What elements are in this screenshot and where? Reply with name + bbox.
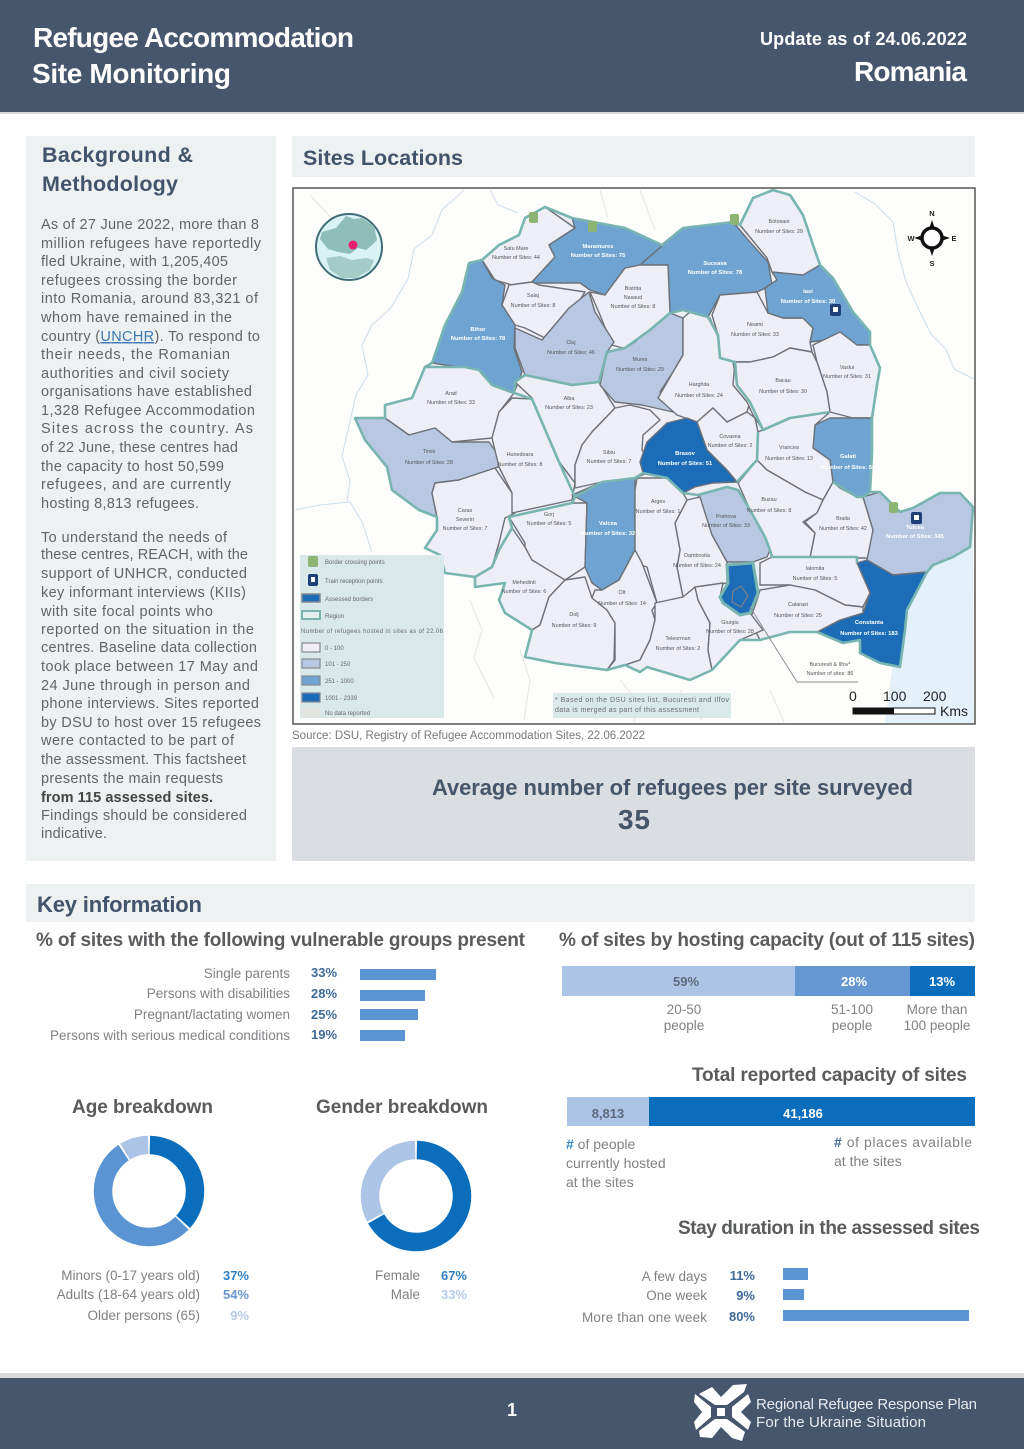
chart: gender breakdown: Male — [391, 1287, 420, 1302]
panel: background and methodology — [26, 136, 276, 861]
paragraph: context: authorities and civil society — [41, 366, 230, 382]
section heading: key information — [26, 884, 975, 922]
legend: No data reported — [325, 711, 370, 717]
chart: stay duration: 9% — [736, 1288, 755, 1303]
county labels: Number of Sites: 7 — [443, 526, 487, 532]
county labels: Number of Sites: 32 — [581, 531, 635, 537]
chart: stay duration: Stay duration in the assessed sites — [678, 1218, 980, 1239]
paragraph: methodology: To understand the needs of — [41, 530, 228, 546]
chart: gender breakdown: 33% — [441, 1287, 467, 1302]
county labels: Teleorman — [665, 636, 691, 642]
chart: stay duration: One week — [646, 1288, 707, 1303]
county labels: Botosani — [769, 219, 789, 225]
county labels: Suceava — [703, 261, 727, 267]
county labels: Number of Sites: 44 — [492, 255, 540, 261]
county labels: Prahova — [716, 514, 736, 520]
county labels: Number of Sites: 2 — [708, 443, 752, 449]
county labels: Number of Sites: 8 — [747, 508, 791, 514]
county labels: Number of Sites: 24 — [673, 563, 721, 569]
legend: Region — [325, 614, 344, 620]
callout: average number of refugees — [292, 747, 975, 861]
update date and country: Romania — [854, 56, 967, 87]
county labels: Bistrita — [625, 286, 641, 292]
chart: gender breakdown: Female — [375, 1268, 420, 1283]
chart: total reported capacity: currently hosted — [566, 1155, 666, 1171]
logo text — [756, 1396, 977, 1431]
county labels: Satu Mare — [504, 246, 528, 252]
chart: total reported capacity: Total reported capacity of sites — [692, 1065, 967, 1086]
chart: vulnerable groups: 33% — [311, 965, 337, 980]
chart: gender breakdown: Gender breakdown — [316, 1097, 488, 1118]
legend: Train reception points — [325, 579, 382, 585]
county labels: Number of Sites: 78 — [451, 336, 506, 342]
paragraph: methodology: were contacted to be part of — [40, 733, 235, 749]
county labels: Number of Sites: 30 — [759, 389, 807, 395]
chart: stay duration: A few days — [642, 1269, 707, 1284]
paragraph: context: million refugees have reportedly — [41, 236, 262, 252]
county labels: Bihor — [470, 327, 486, 333]
county labels: Number of Sites: 345 — [886, 534, 945, 540]
county labels: Constanta — [855, 620, 883, 626]
county labels: Number of Sites: 29 — [616, 367, 664, 373]
legend: Border crossing points — [325, 560, 385, 566]
county labels: Maramures — [583, 244, 613, 250]
county labels: Iasi — [803, 289, 813, 295]
callout: average number of refugees: Average number of refugees per site surveyed — [432, 775, 913, 800]
scale bar: 100 — [883, 688, 907, 704]
chart: hosting capacity: 13% — [929, 974, 955, 989]
county labels: Arges — [651, 499, 665, 505]
compass rose: E — [951, 234, 957, 243]
chart: hosting capacity: 51-100 — [831, 1002, 873, 1017]
legend: Assessed borders — [325, 597, 373, 603]
footer banner — [0, 1373, 1024, 1449]
scale bar: 200 — [923, 688, 947, 704]
chart: gender breakdown: 67% — [441, 1268, 467, 1283]
county labels: Number of Sites: 5 — [527, 521, 571, 527]
county labels: Caras — [458, 508, 472, 514]
map note: data is merged as part of this assessment — [555, 707, 699, 714]
header banner — [0, 0, 1024, 114]
legend: 101 - 250 — [325, 662, 351, 668]
county labels: Severin — [456, 517, 474, 523]
panel heading: sites locations — [292, 136, 975, 177]
county labels: Number of Sites: 51 — [658, 461, 713, 467]
county labels: Sibiu — [603, 450, 615, 456]
county shapes — [355, 190, 973, 680]
chart: total reported capacity — [566, 1065, 975, 1190]
paragraph: context: hosting 8,813 refugees. — [41, 496, 199, 512]
county labels: Number of Sites: 7 — [587, 459, 631, 465]
county labels: Number of Sites: 58 — [821, 465, 876, 471]
chart: total reported capacity: # of places available — [834, 1134, 972, 1150]
county labels: Number of Sites: 8 — [498, 462, 542, 468]
chart: hosting capacity: % of sites by hosting capacity (out of 115 sites) — [559, 930, 975, 951]
scale bar: 0 — [849, 688, 857, 704]
chart: stay duration: 80% — [729, 1309, 755, 1324]
county labels: Salaj — [527, 293, 539, 299]
title: Refugee Accommodation — [33, 22, 354, 53]
chart: gender breakdown — [316, 1097, 488, 1302]
county labels: Number of Sites: 30 — [781, 299, 835, 305]
paragraph: methodology: reported on the situation in the — [41, 622, 254, 638]
paragraph: methodology: support of UNHCR, conducted — [41, 566, 247, 582]
map of Romania — [293, 188, 975, 724]
compass rose: W — [907, 234, 915, 243]
logo text: Regional Refugee Response Plan — [756, 1396, 977, 1413]
county labels: Buzau — [761, 497, 777, 503]
scale bar: Kms — [940, 703, 968, 719]
chart: hosting capacity: 100 people — [904, 1018, 970, 1033]
county labels: Number of Sites: 23 — [545, 405, 593, 411]
county labels: Ialomita — [806, 566, 824, 572]
county labels: Galati — [840, 454, 856, 460]
county labels: Number of Sites: 31 — [823, 374, 871, 380]
paragraph: methodology: these centres, REACH, with the — [41, 547, 248, 563]
county labels: Calarasi — [788, 602, 808, 608]
legend: 0 - 100 — [325, 646, 344, 652]
chart: stay duration: 11% — [730, 1268, 755, 1283]
donut: gender — [370, 1150, 462, 1242]
county labels: Number of Sites: 1 — [636, 509, 680, 515]
county labels: Bacau — [775, 378, 791, 384]
chart: hosting capacity: people — [664, 1018, 704, 1033]
county labels: Gorj — [544, 512, 554, 518]
county labels: Giurgiu — [721, 620, 739, 626]
paragraph: methodology: the assessment. This factsheet — [41, 752, 246, 768]
chart: hosting capacity: 28% — [841, 974, 867, 989]
legend: Number of refugees hosted in sites as of 22.06 — [301, 629, 444, 635]
paragraph: methodology: presents the main requests — [41, 771, 223, 787]
chart: vulnerable groups: 28% — [311, 986, 337, 1001]
county labels: Timis — [423, 449, 435, 455]
county labels: Brasov — [675, 451, 695, 457]
paragraph: context: the capacity to host 50,599 — [41, 459, 224, 475]
county labels: Number of Sites: 9 — [552, 623, 596, 629]
chart: vulnerable groups: 25% — [311, 1007, 337, 1022]
chart: hosting capacity: 59% — [673, 974, 699, 989]
panel heading: Background & — [42, 143, 193, 167]
county labels: Number of Sites: 33 — [427, 400, 475, 406]
paragraph: context: fled Ukraine, with 1,205,405 — [41, 254, 228, 270]
county labels: Arad — [445, 391, 457, 397]
chart: age breakdown — [57, 1097, 249, 1323]
paragraph: methodology: 24 June through in person and — [41, 678, 250, 694]
icons: border crossing points — [529, 212, 898, 513]
paragraph: methodology: by DSU to host over 15 refugees — [41, 715, 261, 731]
chart: vulnerable groups: Persons with serious medical conditions — [50, 1028, 290, 1043]
county labels: Number of Sites: 28 — [405, 460, 453, 466]
paragraph: methodology: from 115 assessed sites. — [41, 790, 213, 806]
chart: age breakdown: 9% — [230, 1308, 249, 1323]
paragraph: context: country (UNCHR). To respond to — [41, 329, 260, 345]
county labels: Cluj — [566, 340, 576, 346]
leader line to Bucharest label — [750, 607, 858, 682]
paragraph: methodology: with site focal points who — [40, 604, 213, 620]
map note: * Based on the DSU sites list, Bucuresti and Ilfov — [555, 697, 730, 704]
county labels: Mures — [633, 357, 647, 363]
paragraph: methodology: key informant interviews (KIIs) — [41, 585, 246, 601]
county labels: Number of Sites: 42 — [819, 526, 867, 532]
chart: hosting capacity: 20-50 — [667, 1002, 701, 1017]
paragraph: context: into Romania, around 83,321 of — [41, 291, 259, 307]
title: Site Monitoring — [32, 58, 231, 89]
chart: age breakdown: 37% — [223, 1268, 249, 1283]
county labels: Covasna — [719, 434, 741, 440]
county labels: Number of Sites: 33 — [702, 523, 750, 529]
paragraph: methodology: took place between 17 May and — [41, 659, 258, 675]
scale bar — [849, 688, 968, 719]
county labels: Number of Sites: 8 — [511, 303, 555, 309]
county labels: Tulcea — [906, 525, 924, 531]
paragraph: context: whom have remained in the — [40, 310, 232, 326]
county labels: Bucuresti & Ilfov* — [809, 662, 851, 668]
county labels: Neamt — [747, 322, 763, 328]
chart: stay duration: More than one week — [582, 1310, 707, 1325]
county labels: Number of Sites: 5 — [793, 576, 837, 582]
chart: total reported capacity: 8,813 — [592, 1106, 624, 1121]
chart: vulnerable groups: Single parents — [204, 966, 290, 981]
compass rose: S — [929, 259, 935, 268]
county labels: Number of Sites: 29 — [755, 229, 803, 235]
legend — [300, 555, 444, 718]
county labels: Number of Sites: 28 — [706, 629, 754, 635]
county labels: Hunedoara — [507, 452, 533, 458]
paragraph: context: of 22 June, these centres had — [41, 440, 238, 456]
chart: vulnerable groups: % of sites with the following vulnerable groups present — [36, 930, 526, 951]
county labels: Vrancea — [779, 445, 799, 451]
paragraph: context: 1,328 Refugee Accommodation — [41, 403, 255, 419]
icons: train reception points — [830, 304, 922, 524]
county labels: Number of Sites: 33 — [731, 332, 779, 338]
compass rose: N — [929, 209, 935, 218]
county labels: Number of Sites: 25 — [774, 613, 822, 619]
county labels: Number of Sites: 78 — [688, 270, 743, 276]
legend: 251 - 1000 — [325, 679, 354, 685]
chart: age breakdown: 54% — [223, 1287, 249, 1302]
paragraph: methodology: centres. Baseline data collection — [41, 640, 257, 656]
panel heading: sites locations: Sites Locations — [303, 146, 463, 170]
paragraph: context: organisations have established — [41, 384, 252, 400]
county labels: Harghita — [689, 382, 709, 388]
chart: stay duration — [582, 1218, 980, 1325]
county labels: Dambovita — [684, 553, 710, 559]
county labels: Nasaud — [624, 295, 642, 301]
chart: hosting capacity: people — [832, 1018, 872, 1033]
chart: vulnerable groups — [36, 930, 526, 1043]
county labels — [405, 219, 945, 677]
county labels: Number of Sites: 46 — [547, 350, 595, 356]
county labels: Alba — [564, 396, 574, 402]
update date and country — [760, 29, 967, 87]
county labels: Number of Sites: 8 — [611, 304, 655, 310]
map source note: Source: DSU, Registry of Refugee Accommodation Sites, 22.06.2022 — [292, 730, 645, 742]
chart: age breakdown: Minors (0-17 years old) — [61, 1268, 200, 1283]
chart: vulnerable groups: Pregnant/lactating women — [134, 1007, 290, 1022]
logo text: For the Ukraine Situation — [756, 1414, 926, 1431]
panel heading — [42, 143, 193, 196]
chart: hosting capacity — [559, 930, 975, 1033]
paragraph: methodology — [40, 530, 261, 842]
paragraph: context: Sites across the country. As — [41, 421, 253, 437]
county labels: Number of Sites: 75 — [571, 253, 626, 259]
county labels: Valcea — [599, 521, 617, 527]
donut: age — [103, 1145, 195, 1237]
paragraph: context: As of 27 June 2022, more than 8 — [41, 217, 259, 233]
county labels: Mehedinti — [512, 580, 536, 586]
chart: total reported capacity: 41,186 — [783, 1106, 823, 1121]
paragraph: context: their needs, the Romanian — [41, 347, 230, 363]
paragraph: methodology: phone interviews. Sites reported — [41, 696, 259, 712]
chart: vulnerable groups: Persons with disabilities — [147, 986, 290, 1001]
county labels: Number of Sites: 14 — [598, 601, 646, 607]
county labels: Dolj — [569, 612, 579, 618]
chart: total reported capacity: at the sites — [566, 1174, 634, 1190]
county labels: Number of sites: 86 — [807, 671, 853, 677]
chart: hosting capacity: More than — [907, 1002, 967, 1017]
county labels: Olt — [619, 590, 625, 596]
paragraph: methodology: Findings should be considered — [41, 808, 247, 824]
legend: 1001 - 2339 — [325, 696, 358, 702]
compass rose — [907, 209, 957, 268]
chart: age breakdown: Older persons (65) — [87, 1308, 200, 1323]
paragraph: context: refugees, and are currently — [41, 477, 232, 493]
county labels: Number of Sites: 2 — [656, 646, 700, 652]
inset globe locator — [316, 214, 382, 280]
paragraph: methodology: indicative. — [41, 826, 107, 842]
panel heading: Methodology — [42, 172, 178, 196]
logo: regional refugee response plan — [694, 1384, 751, 1441]
county labels: Number of Sites: 6 — [502, 589, 546, 595]
update date and country: Update as of 24.06.2022 — [760, 29, 967, 49]
page number: 1 — [507, 1400, 517, 1420]
county labels: Number of Sites: 13 — [765, 456, 813, 462]
map note — [553, 693, 731, 718]
chart: age breakdown: Adults (18-64 years old) — [57, 1287, 200, 1302]
chart: total reported capacity: # of people — [566, 1136, 636, 1152]
county labels: Vaslui — [840, 365, 854, 371]
section heading: key information: Key information — [37, 892, 202, 917]
paragraph: context — [40, 217, 262, 512]
county labels: Braila — [836, 516, 850, 522]
chart: age breakdown: Age breakdown — [72, 1097, 213, 1118]
county labels: Number of Sites: 183 — [840, 631, 899, 637]
county labels: Number of Sites: 24 — [675, 393, 723, 399]
region boundaries — [355, 190, 973, 680]
paragraph: context: refugees crossing the border — [41, 273, 237, 289]
chart: vulnerable groups: 19% — [311, 1027, 337, 1042]
chart: total reported capacity: at the sites — [834, 1153, 902, 1169]
title — [32, 22, 354, 89]
callout: average number of refugees: 35 — [618, 804, 650, 835]
